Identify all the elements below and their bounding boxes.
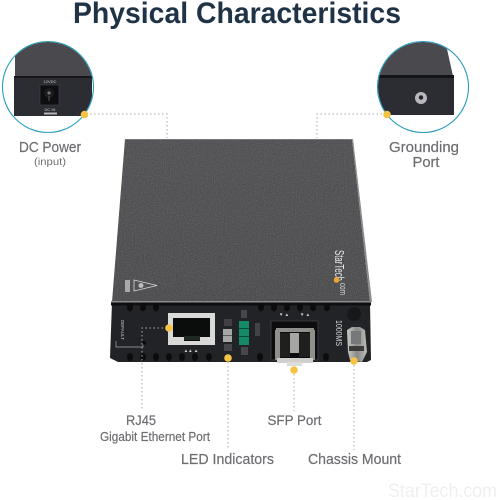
label: RJ45 Gigabit Ethernet Port: [100, 413, 210, 444]
logo: StarTech.com: StarTech: [332, 250, 347, 281]
label: Grounding Port: [389, 140, 459, 171]
marker: grounding: [383, 111, 391, 118]
label: DC Power: (input): [34, 156, 66, 168]
RJ45 port: ▲▲ ▲: [184, 348, 198, 353]
logo: StarTech.com: com: [338, 283, 348, 295]
label: DC Power: [19, 140, 81, 168]
chassis mount connector: [347, 327, 367, 362]
connector: chassis leader: [353, 365, 355, 450]
callout: grounding port inset: [378, 40, 468, 132]
SFP port: [271, 312, 318, 366]
connector: RJ45 leader: [142, 328, 167, 410]
vents: top row: [127, 302, 330, 312]
marker: LED: [224, 354, 232, 362]
default button label: DEFAULT: [120, 320, 125, 340]
default button label: [116, 320, 146, 347]
label: DC Power: DC Power: [19, 140, 81, 156]
label: Grounding Port: Port: [412, 155, 440, 171]
device top panel: [112, 139, 370, 302]
connector: grounding leader: [317, 114, 386, 138]
device front panel: [110, 302, 371, 362]
icon: laser warning triangle: [125, 280, 157, 292]
callout: DC power inset: [2, 38, 94, 132]
label: Chassis Mount: Chassis Mount: [308, 452, 401, 468]
label: Grounding Port: Grounding: [389, 140, 459, 156]
LED indicators: [223, 310, 260, 355]
callout: DC power inset: 12VDC: [44, 79, 57, 84]
SFP port: ▼ ▲: [300, 312, 310, 317]
label: RJ45 Gigabit Ethernet Port: RJ45: [126, 413, 156, 428]
connector: SFP leader: [293, 374, 295, 411]
label: LED Indicators: LED Indicators: [181, 452, 274, 468]
device: media converter: [110, 139, 372, 366]
button: [347, 307, 361, 321]
SFP port: ▼ ▲: [279, 312, 289, 317]
label: SFP Port: SFP Port: [268, 413, 322, 428]
RJ45 port: [168, 313, 215, 353]
connector: DC power leader: [86, 114, 167, 138]
callout: DC power inset: DC IN: [45, 107, 56, 112]
connector: LED leader: [227, 362, 229, 450]
marker: DC power: [81, 111, 88, 118]
vents: bottom row: [127, 353, 329, 361]
marker: chassis: [350, 357, 358, 365]
marker: RJ45: [165, 324, 173, 332]
label: RJ45 Gigabit Ethernet Port: Gigabit Ethernet Port: [100, 429, 210, 444]
icon: ground screw: [415, 92, 427, 104]
icon: power jack: [40, 85, 59, 105]
speed label: 1000MS: [334, 320, 343, 346]
marker: SFP: [290, 366, 298, 374]
